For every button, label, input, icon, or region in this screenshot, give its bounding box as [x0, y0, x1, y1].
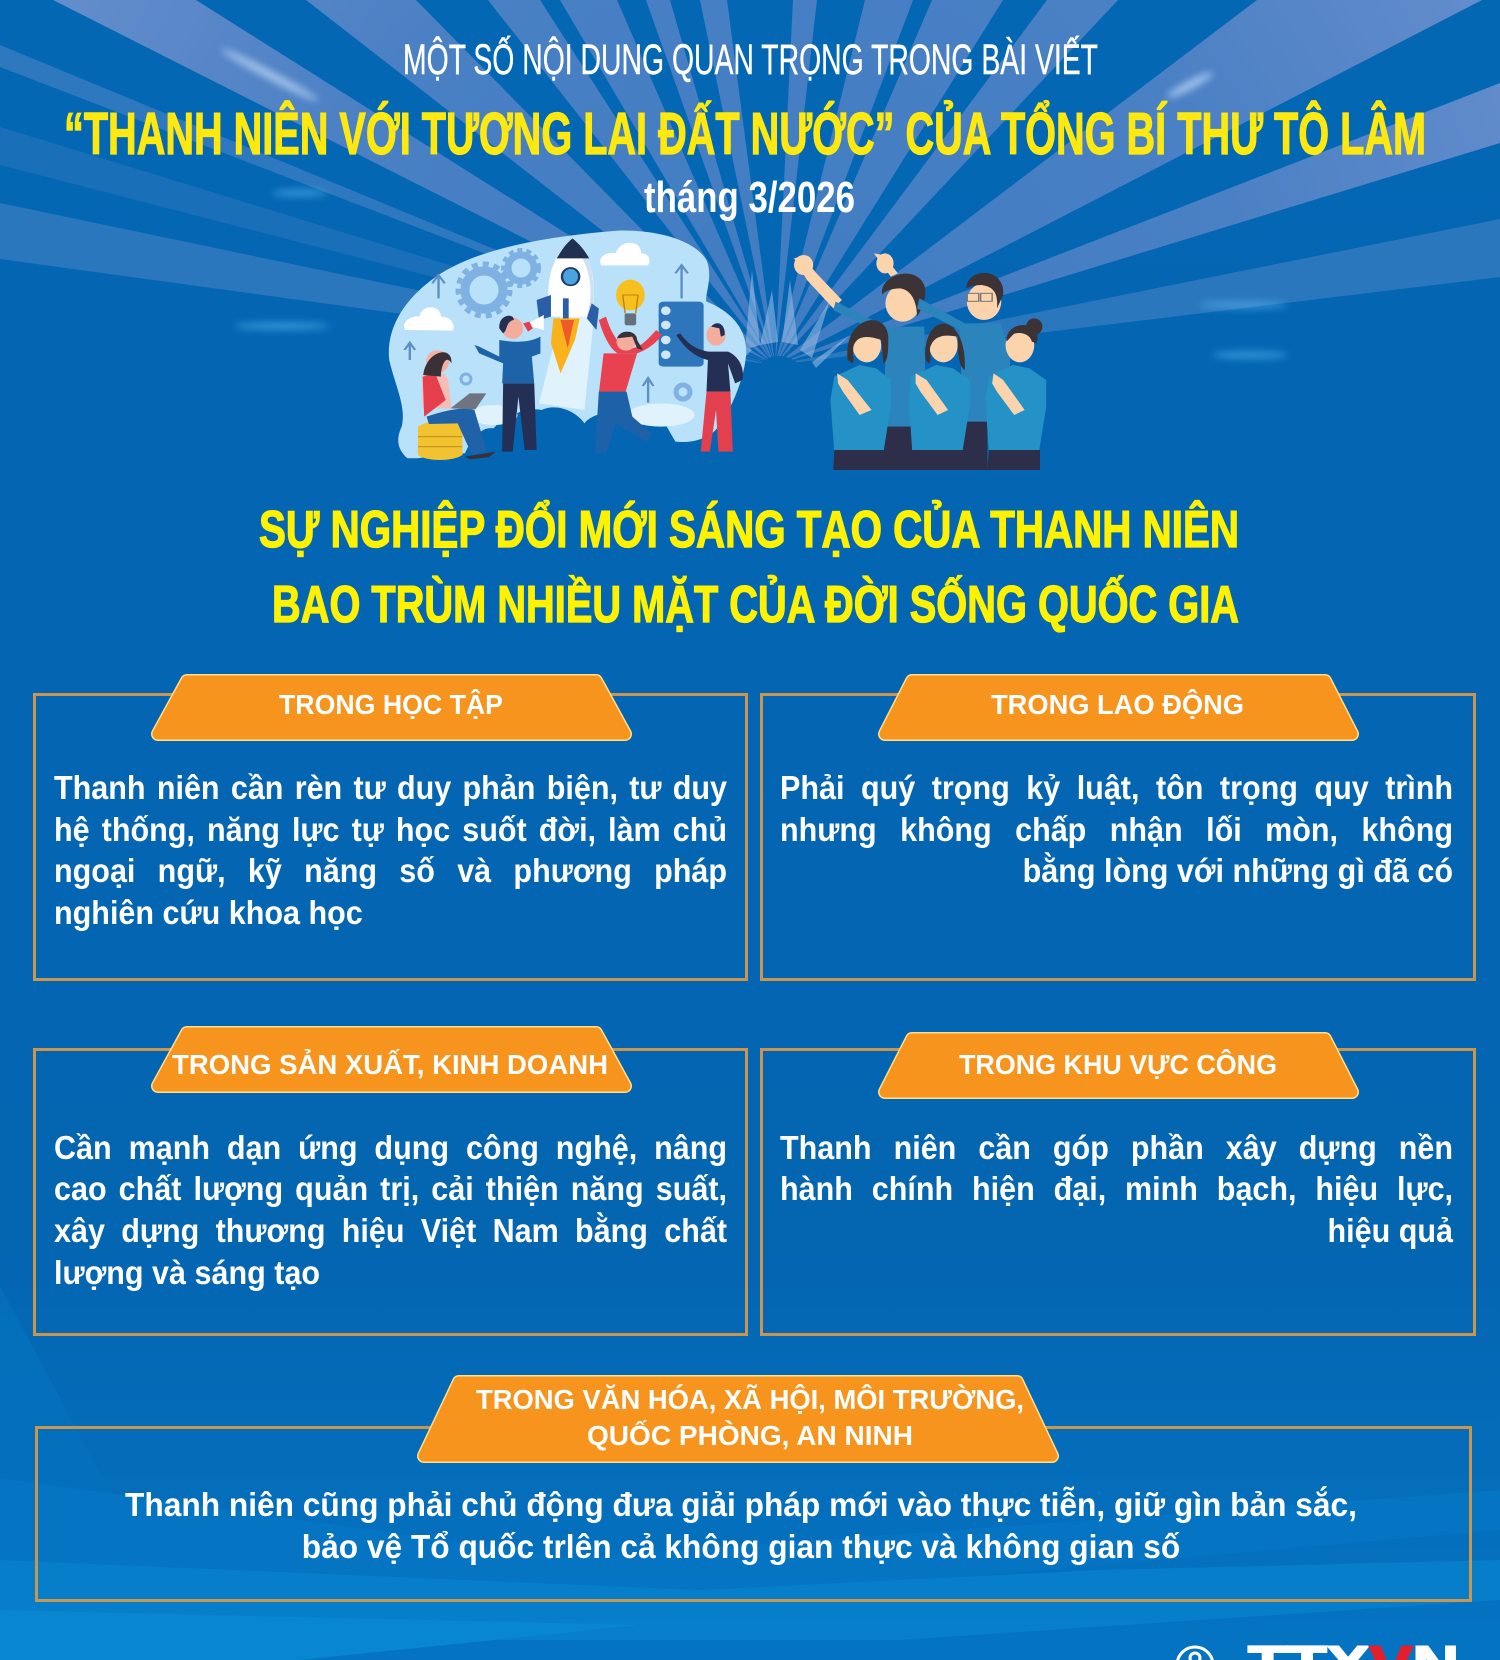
tab heading: TRONG HỌC TẬP: [279, 689, 503, 720]
section heading line 1: SỰ NGHIỆP ĐỔI MỚI SÁNG TẠO CỦA THANH NIÊN: [259, 500, 1239, 559]
body text: bằng lòng với những gì đã có: [1023, 852, 1453, 889]
body text: lượng và sáng tạo: [54, 1254, 320, 1291]
icon: light bulb: [616, 280, 645, 325]
tab heading: [878, 674, 1359, 741]
tab heading: [417, 1375, 1059, 1463]
body text: ngoại ngữ, kỹ năng số và phương pháp: [54, 852, 727, 889]
panel frame: [35, 1426, 1472, 1602]
back-left man with raised arm: [794, 253, 927, 470]
man pointing: [676, 323, 743, 452]
icon: gears: [458, 250, 690, 399]
body text: hành chính hiện đại, minh bạch, hiệu lực,: [780, 1170, 1453, 1207]
tab heading: [151, 674, 632, 741]
panel: trong văn hóa, xã hội, môi trường, quốc phòng, an ninh: [35, 1375, 1472, 1602]
panel frame: [760, 693, 1476, 981]
tab heading: QUỐC PHÒNG, AN NINH: [587, 1419, 913, 1451]
panel: trong khu vực công: [760, 1032, 1476, 1336]
body text: bảo vệ Tổ quốc trlên cả không gian thực và không gian số: [302, 1528, 1180, 1565]
panel frame: [33, 1048, 748, 1336]
body text: Cần mạnh dạn ứng dụng công nghệ, nâng: [54, 1129, 727, 1166]
tab heading: TRONG KHU VỰC CÔNG: [959, 1048, 1277, 1080]
tab heading: TRONG VĂN HÓA, XÃ HỘI, MÔI TRƯỜNG,: [476, 1383, 1024, 1415]
body text: Thanh niên cần rèn tư duy phản biện, tư duy: [54, 769, 727, 806]
body text: nghiên cứu khoa học: [54, 894, 363, 931]
icon: arrows: [405, 265, 688, 403]
body text: Thanh niên cũng phải chủ động đưa giải pháp mới vào thực tiễn, giữ gìn bản sắc,: [125, 1486, 1357, 1523]
panel: trong học tập: [33, 674, 748, 981]
panel frame: [760, 1048, 1476, 1336]
seated woman with coins: [418, 350, 496, 460]
icon: clouds: [404, 243, 650, 331]
header titles: [64, 35, 1426, 634]
illustration: innovation team with rocket: [388, 230, 746, 460]
icon: copyright circle: [1177, 1647, 1213, 1660]
panel: trong sản xuất, kinh doanh: [33, 1026, 748, 1336]
panel: trong lao động: [760, 674, 1476, 981]
body text: Thanh niên cần góp phần xây dựng nền: [780, 1129, 1453, 1166]
footer logo: TTXVN: [1176, 1640, 1459, 1660]
body text: Phải quý trọng kỷ luật, tôn trọng quy trình: [780, 769, 1453, 806]
body text: [780, 1129, 1454, 1249]
icon: checklist: [659, 302, 704, 367]
tab heading: [878, 1032, 1359, 1099]
illustration: youth union group saluting: [794, 253, 1046, 470]
subtitle: MỘT SỐ NỘI DUNG QUAN TRỌNG TRONG BÀI VIẾT: [403, 35, 1098, 84]
body text: [125, 1486, 1357, 1565]
front-left woman: [830, 320, 891, 470]
date: tháng 3/2026: [644, 173, 855, 222]
body text: [54, 1129, 727, 1291]
body text: [780, 769, 1453, 889]
tab heading: TRONG LAO ĐỘNG: [991, 688, 1244, 720]
tab heading: [151, 1026, 632, 1093]
body text: cao chất lượng quản trị, cải thiện năng suất,: [54, 1170, 727, 1207]
section heading line 2: BAO TRÙM NHIỀU MẶT CỦA ĐỜI SỐNG QUỐC GIA: [272, 575, 1239, 634]
body text: hệ thống, năng lực tự học suốt đời, làm chủ: [54, 811, 727, 848]
panel frame: [33, 693, 748, 981]
front-middle woman: [909, 324, 970, 470]
front-right woman: [985, 318, 1046, 470]
tab heading: TRONG SẢN XUẤT, KINH DOANH: [172, 1048, 608, 1080]
icon: rocket: [548, 238, 594, 317]
body text: hiệu quả: [1328, 1212, 1453, 1249]
back-right man with glasses: [917, 273, 1010, 470]
body text: xây dựng thương hiệu Việt Nam bằng chất: [54, 1212, 727, 1249]
man with megaphone: [474, 315, 544, 452]
woman celebrating: [595, 317, 662, 453]
body text: [54, 769, 727, 931]
body text: nhưng không chấp nhận lối mòn, không: [780, 811, 1453, 848]
